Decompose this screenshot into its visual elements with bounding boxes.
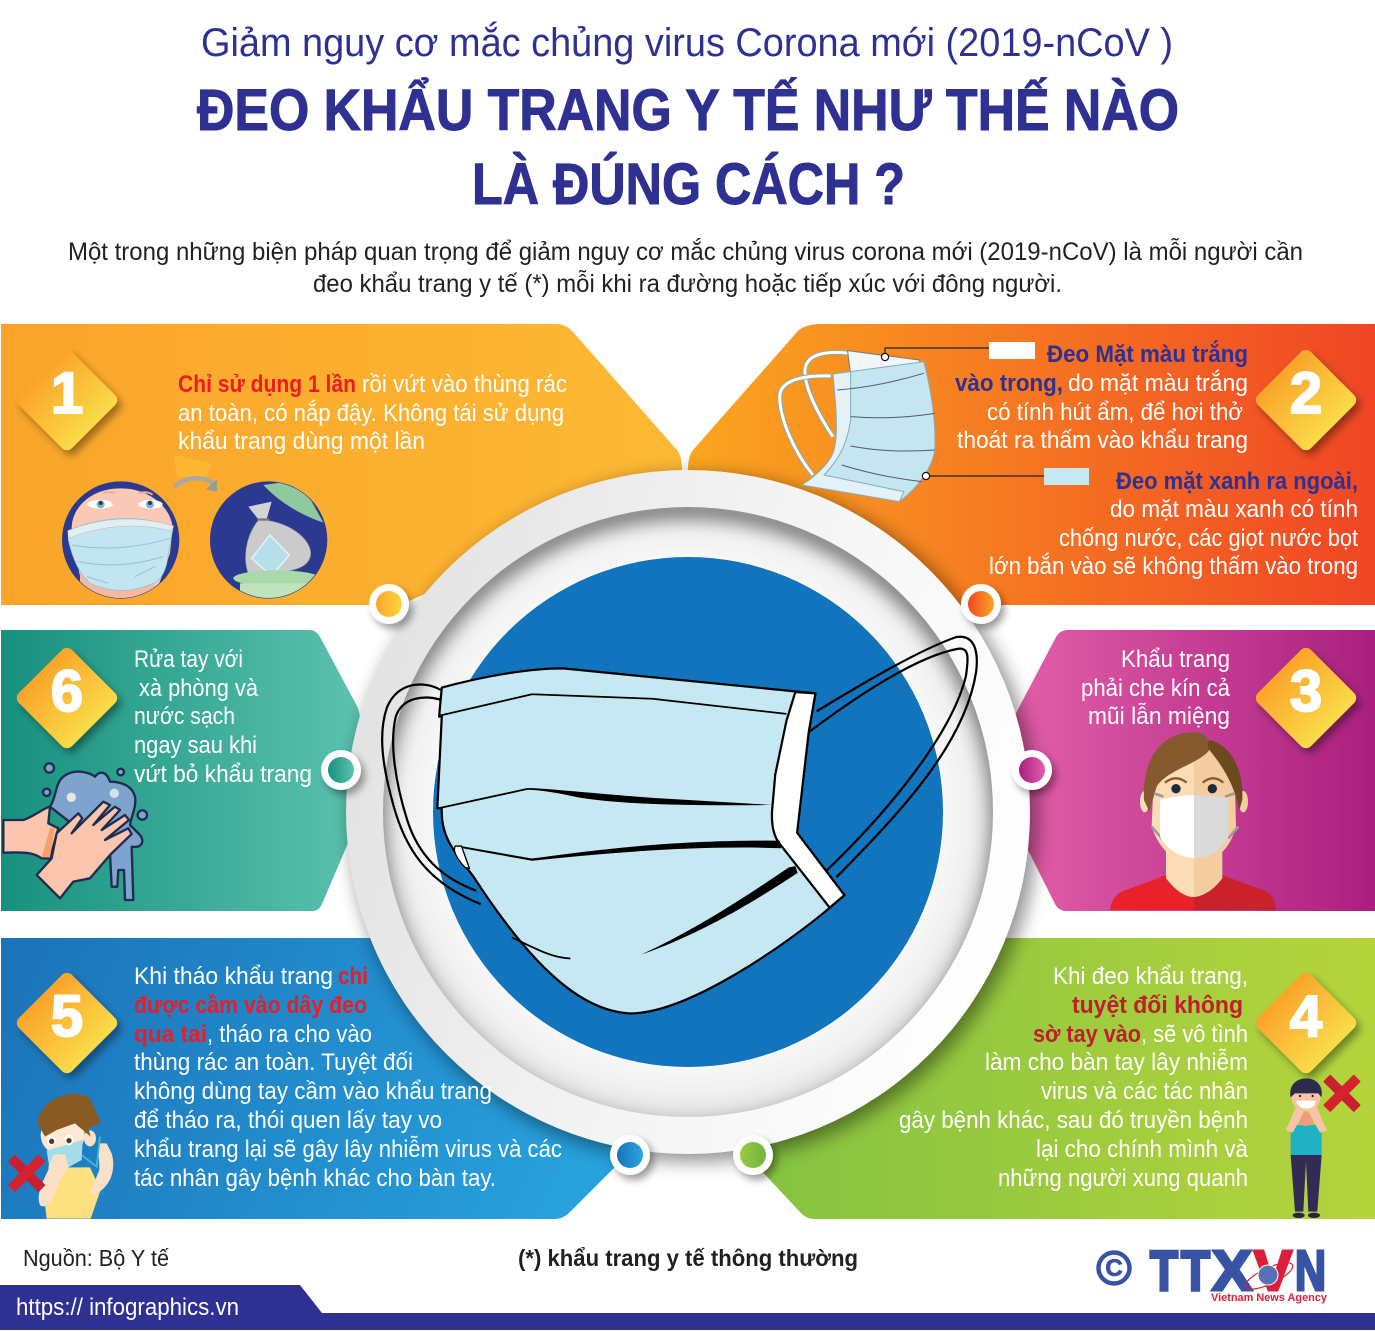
text: step 5: thùng rác an toàn. Tuyệt đối xyxy=(134,1049,413,1076)
text: step 4: virus và các tác nhân xyxy=(1041,1078,1248,1105)
text: step 2 white side: Đeo Mặt màu trắng xyxy=(1047,340,1248,368)
text: step 2 white side: có tính hút ẩm, để hơi thở xyxy=(987,399,1243,426)
subtitle: Giảm nguy cơ mắc chủng virus Corona mới (2019-nCoV ) xyxy=(201,20,1173,65)
text: step 5: chi xyxy=(338,963,368,990)
badge: number 3 xyxy=(1253,645,1359,751)
badge: number 6 xyxy=(14,645,120,751)
text: step 5: khẩu trang lại sẽ gây lây nhiễm virus và các xyxy=(134,1136,562,1163)
node dot: step 4 xyxy=(733,1135,773,1175)
panel: step 5 background xyxy=(1,938,632,1219)
badge: number 2 xyxy=(1253,347,1359,453)
badge: number 5 xyxy=(14,970,120,1076)
text: step 4: những người xung quanh xyxy=(998,1165,1248,1192)
panel: step 4 background xyxy=(742,938,1375,1219)
title: LÀ ĐÚNG CÁCH ? xyxy=(472,152,905,217)
logo: TTXVN: Vietnam News Agency xyxy=(1211,1292,1328,1304)
icon: washing hands with soap xyxy=(3,763,147,900)
icon: mask in trash bag xyxy=(210,480,327,603)
text: step 2 white side: thoát ra thấm vào khẩu trang xyxy=(957,427,1248,454)
text: step 4: tuyệt đối không xyxy=(1072,992,1243,1019)
badge: number 1: 1 xyxy=(51,361,83,426)
intro text: đeo khẩu trang y tế (*) mỗi khi ra đường hoặc tiếp xúc với đông người. xyxy=(313,269,1062,298)
icon: boy touching mask with red cross xyxy=(0,1094,113,1219)
footnote: (*) khẩu trang y tế thông thường xyxy=(518,1245,858,1271)
text: step 6: vứt bỏ khẩu trang xyxy=(134,761,312,788)
text: step 5: để tháo ra, thói quen lấy tay vo xyxy=(134,1107,442,1134)
footer bar xyxy=(0,1285,1375,1330)
text: step 2 blue side: lớn bắn vào sẽ không thấm vào trong xyxy=(989,553,1358,580)
badge: number 3: 3 xyxy=(1290,659,1322,724)
text: step 1 xyxy=(178,371,567,455)
text: step 5 xyxy=(134,963,562,1192)
node dot: step 5 xyxy=(610,1135,650,1175)
text: step 5: , tháo ra cho vào xyxy=(207,1021,372,1048)
panel: step 2 background xyxy=(688,324,1375,605)
badge: number 4 xyxy=(1253,970,1359,1076)
node dot: step 1 xyxy=(369,584,409,624)
text: step 2 blue side: do mặt màu xanh có tính xyxy=(1110,496,1358,523)
icon: person wearing mask covering nose and mouth xyxy=(1110,732,1276,910)
text: step 6: nước sạch xyxy=(134,703,235,730)
intro text: Một trong những biện pháp quan trọng để giảm nguy cơ mắc chủng virus corona mới (2019-nCoV) là mỗi người cần xyxy=(68,237,1303,266)
text: step 4: Khi đeo khẩu trang, xyxy=(1053,963,1248,990)
badge: number 2: 2 xyxy=(1290,361,1322,426)
text: step 2 white side: vào trong, xyxy=(955,370,1063,397)
icon: face wearing mask xyxy=(62,481,179,600)
intro text xyxy=(68,237,1303,298)
icon: large surgical mask xyxy=(382,637,977,1013)
text: step 5: qua tai xyxy=(134,1021,207,1048)
text: step 2 blue side xyxy=(989,468,1358,580)
text: step 1: Chỉ sử dụng 1 lần xyxy=(178,371,356,398)
website url: https:// infographics.vn xyxy=(16,1294,239,1321)
text: step 1: rồi vứt vào thùng rác xyxy=(362,371,567,398)
badge: number 1 xyxy=(14,347,120,453)
text: step 5: không dùng tay cầm vào khẩu trang xyxy=(134,1078,492,1105)
text: step 5: được cầm vào dây đeo xyxy=(134,992,367,1019)
text: step 1: an toàn, có nắp đậy. Không tái sử dụng xyxy=(178,400,564,427)
icon: arrow between circles xyxy=(174,455,217,492)
text: step 4: gây bệnh khác, sau đó truyền bệnh xyxy=(899,1107,1248,1134)
logo: TTXVN: X xyxy=(1212,1239,1252,1303)
text: step 2 white side: do mặt màu trắng xyxy=(1068,370,1248,397)
text: step 4: làm cho bàn tay lây nhiễm xyxy=(985,1049,1248,1076)
node dot: step 6 xyxy=(321,750,361,790)
text: step 5: tác nhân gây bệnh khác cho bàn tay. xyxy=(134,1165,496,1192)
text: step 5: Khi tháo khẩu trang xyxy=(134,963,333,990)
title xyxy=(197,78,1179,217)
badge: number 5: 5 xyxy=(51,984,83,1049)
node dot: step 3 xyxy=(1012,750,1052,790)
logo: TTXVN: T xyxy=(1150,1239,1178,1303)
text: step 4: , sẽ vô tình xyxy=(1141,1021,1248,1048)
text: step 6: ngay sau khi xyxy=(134,732,257,759)
logo: TTXVN: C xyxy=(1105,1255,1123,1282)
text: step 3: Khẩu trang xyxy=(1121,646,1230,673)
panel: step 6 background xyxy=(1,630,360,911)
text: step 3: mũi lẫn miệng xyxy=(1088,703,1230,730)
logo: TTXVN: T xyxy=(1181,1239,1210,1303)
text: step 2 blue side: Đeo mặt xanh ra ngoài, xyxy=(1116,468,1358,495)
node dot: step 2 xyxy=(961,584,1001,624)
title: ĐEO KHẨU TRANG Y TẾ NHƯ THẾ NÀO xyxy=(197,78,1179,143)
text: step 3: phải che kín cả xyxy=(1081,675,1231,702)
text: step 6 xyxy=(134,646,312,788)
text: step 4: sờ tay vào xyxy=(1033,1021,1141,1048)
central circle with mask xyxy=(346,470,1038,1162)
panel: step 1 background xyxy=(1,324,682,605)
text: step 4 xyxy=(899,963,1249,1192)
logo: TTXVN: V xyxy=(1254,1239,1292,1303)
text: step 6: xà phòng và xyxy=(139,675,259,702)
icon: mask with callouts xyxy=(780,342,1089,502)
logo: TTXVN: N xyxy=(1295,1239,1326,1303)
text: step 2 white side xyxy=(955,340,1248,454)
text: step 1: khẩu trang dùng một lần xyxy=(178,428,425,455)
logo: TTXVN xyxy=(1098,1239,1328,1304)
text: step 6: Rửa tay với xyxy=(134,646,243,673)
panel: step 3 background xyxy=(1015,630,1375,911)
icon: man touching mask with red cross xyxy=(1286,1063,1373,1218)
badge: number 4: 4 xyxy=(1290,984,1322,1049)
badge: number 6: 6 xyxy=(51,659,83,724)
source note: Nguồn: Bộ Y tế xyxy=(23,1245,169,1271)
text: step 4: lại cho chính mình và xyxy=(1036,1136,1249,1163)
text: step 3 xyxy=(1081,646,1231,730)
